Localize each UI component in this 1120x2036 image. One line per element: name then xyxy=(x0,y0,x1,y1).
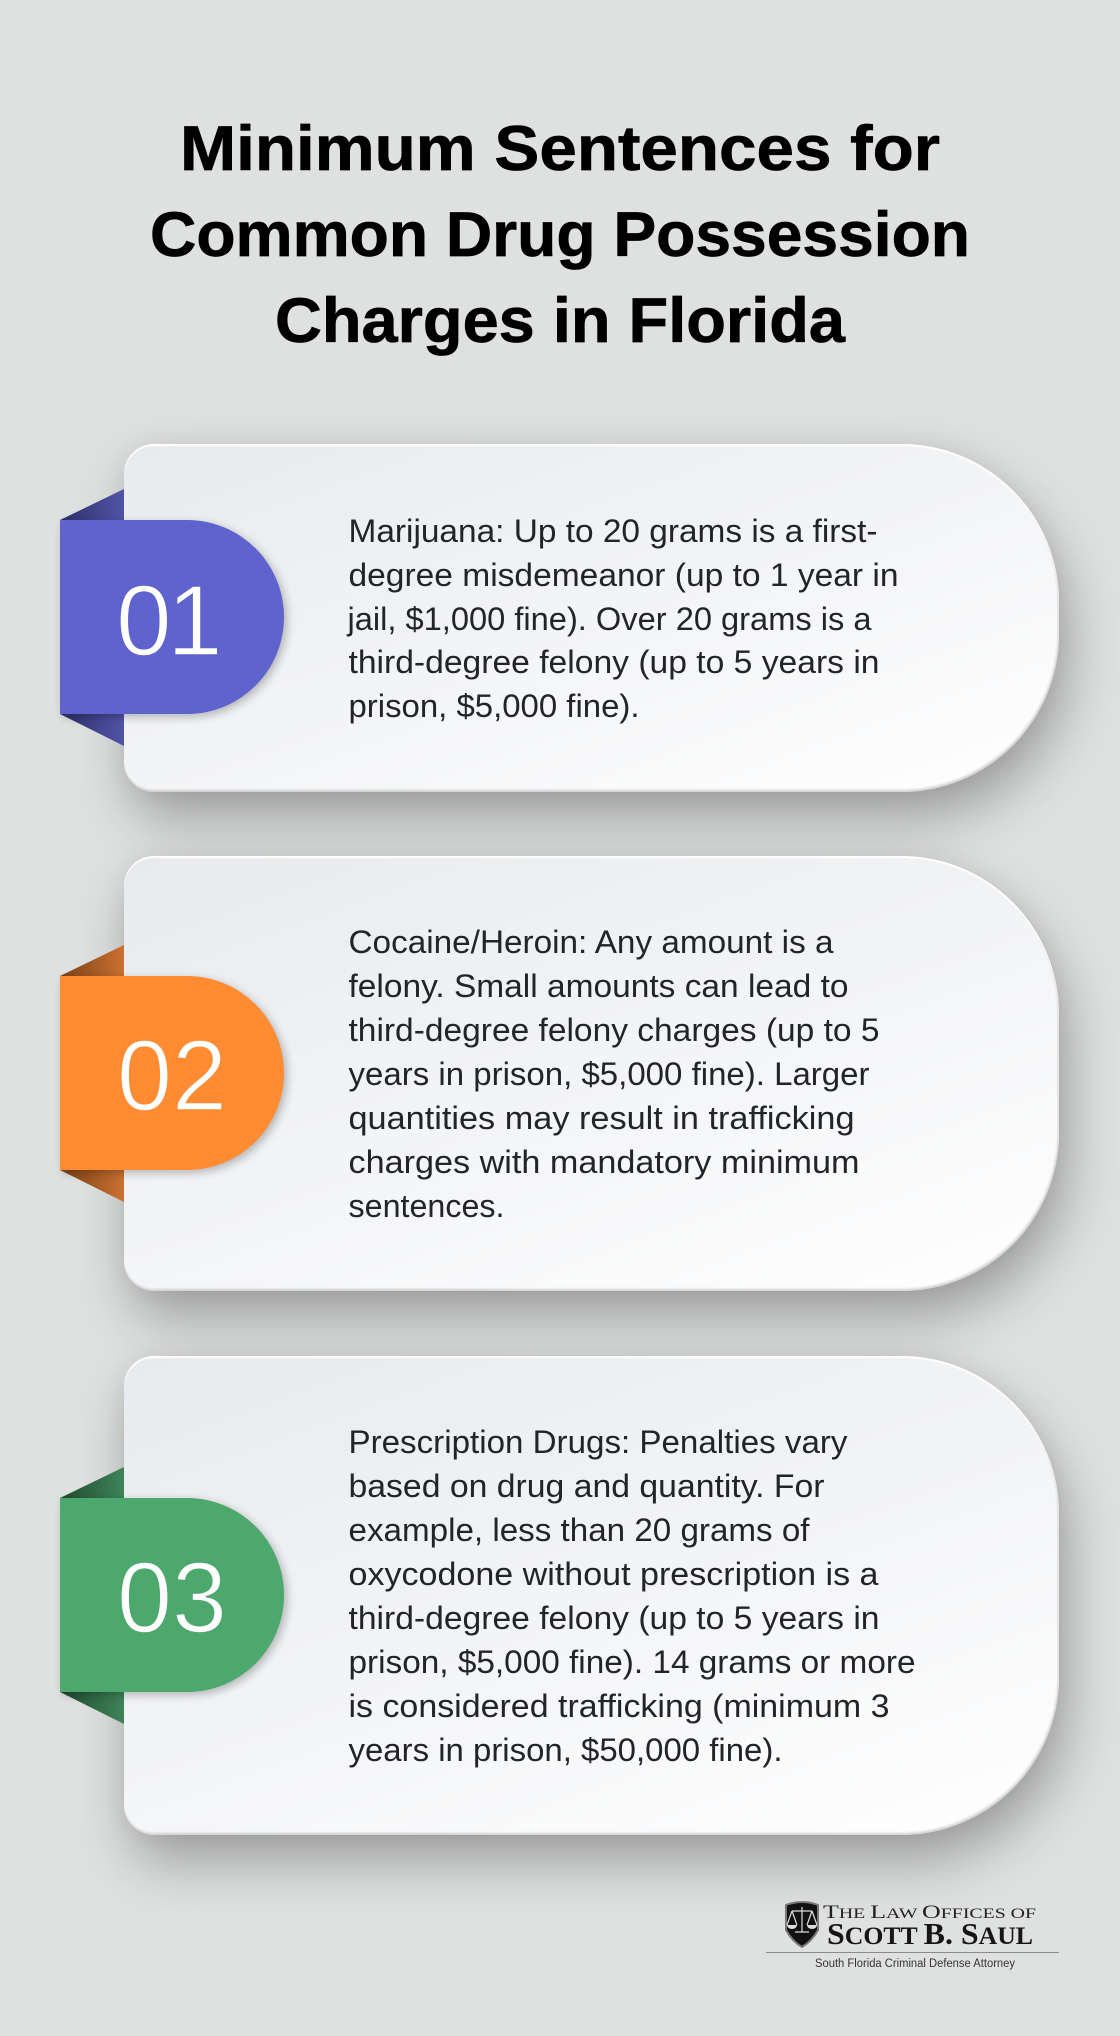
card background xyxy=(124,444,1059,792)
text: marijuana penalties: third-degree felony (up to 5 years in xyxy=(348,644,880,680)
title xyxy=(150,114,970,356)
text: prescription drug penalties: is considered trafficking (minimum 3 xyxy=(348,1688,890,1724)
text: prescription drug penalties xyxy=(348,1424,916,1768)
tagline: South Florida Criminal Defense Attorney xyxy=(815,1958,1015,1970)
panel: prescription drugs xyxy=(58,1348,1097,1891)
title: Minimum Sentences for xyxy=(180,114,940,184)
text: cocaine and heroin penalties: Cocaine/Heroin: Any amount is a xyxy=(348,924,834,960)
logo: law offices of Scott B. Saul xyxy=(766,1901,1059,1970)
ribbon fold xyxy=(60,489,124,746)
text: cocaine and heroin penalties: charges with mandatory minimum xyxy=(348,1144,860,1180)
number badge 02 xyxy=(60,976,284,1170)
text: prescription drug penalties: oxycodone without prescription is a xyxy=(348,1556,879,1592)
text: prescription drug penalties: prison, $5,000 fine). 14 grams or more xyxy=(348,1644,916,1680)
text: prescription drug penalties: Prescription Drugs: Penalties vary xyxy=(348,1424,848,1460)
firm name: T HE L AW O FFICES OF xyxy=(823,1902,1036,1923)
icon: shield with scales xyxy=(786,1902,818,1947)
text: marijuana penalties: Marijuana: Up to 20 grams is a first- xyxy=(348,513,878,549)
text: cocaine and heroin penalties: third-degree felony charges (up to 5 xyxy=(348,1012,880,1048)
ribbon fold xyxy=(60,1467,124,1724)
card background xyxy=(124,1356,1059,1835)
number badge 01: 0 xyxy=(116,565,172,677)
text: prescription drug penalties: example, less than 20 grams of xyxy=(348,1512,810,1548)
card background xyxy=(124,856,1059,1291)
text: cocaine and heroin penalties: sentences. xyxy=(348,1188,504,1224)
number badge 01 xyxy=(60,520,284,714)
number badge 02: 02 xyxy=(117,1020,227,1132)
text: cocaine and heroin penalties xyxy=(348,924,880,1224)
panel: cocaine and heroin xyxy=(58,848,1097,1347)
text: marijuana penalties xyxy=(346,513,898,724)
ribbon fold xyxy=(60,945,124,1202)
text: marijuana penalties: prison, $5,000 fine). xyxy=(348,688,640,724)
text: cocaine and heroin penalties: quantities may result in trafficking xyxy=(348,1100,854,1136)
text: cocaine and heroin penalties: years in prison, $5,000 fine). Larger xyxy=(348,1056,870,1092)
title: Charges in Florida xyxy=(275,286,846,356)
text: prescription drug penalties: years in prison, $50,000 fine). xyxy=(348,1732,782,1768)
logo: law offices of Scott B. Saul: SCOTT B. SAUL xyxy=(827,1916,1033,1951)
text: marijuana penalties: jail, $1,000 fine). Over 20 grams is a xyxy=(346,601,872,637)
text: prescription drug penalties: third-degree felony (up to 5 years in xyxy=(348,1600,880,1636)
number badge 03 xyxy=(60,1498,284,1692)
text: marijuana penalties: degree misdemeanor (up to 1 year in xyxy=(348,557,898,593)
panel: marijuana xyxy=(58,434,1096,848)
number badge 01: 1 xyxy=(167,565,223,677)
text: cocaine and heroin penalties: felony. Small amounts can lead to xyxy=(348,968,848,1004)
title: Common Drug Possession xyxy=(150,200,970,270)
number badge 03: 03 xyxy=(117,1542,227,1654)
text: prescription drug penalties: based on drug and quantity. For xyxy=(348,1468,825,1504)
